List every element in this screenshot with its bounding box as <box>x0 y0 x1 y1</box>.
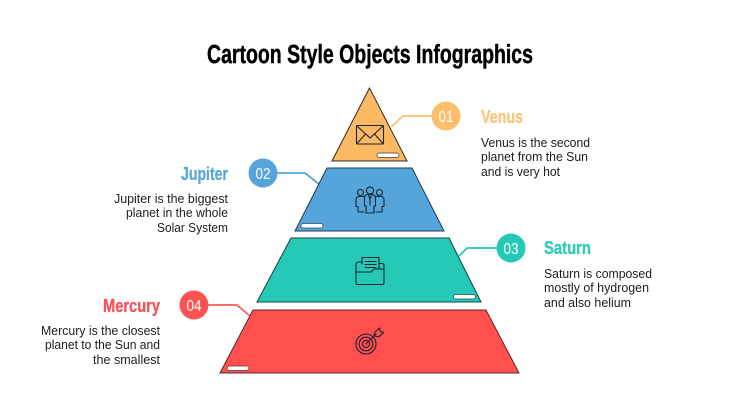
badge: 04: 04 <box>186 298 202 315</box>
badge: 01: 01 <box>438 109 454 126</box>
badge: 02: 02 <box>256 166 271 183</box>
badge: 02 <box>248 158 278 188</box>
pyramid tier 2: blue <box>295 168 444 231</box>
text block: Mercury: the smallest <box>93 353 161 367</box>
text block: Venus <box>481 107 590 179</box>
icon: team of people <box>356 187 384 213</box>
pyramid tier 3: teal <box>257 238 481 302</box>
title: Cartoon Style Objects Infographics <box>207 41 533 69</box>
text block: Saturn <box>544 238 652 310</box>
text block: Saturn: Saturn is composed <box>544 267 652 281</box>
text block: Saturn: mostly of hydrogen <box>544 281 649 295</box>
text block: Mercury <box>41 296 161 367</box>
pyramid tier 4: red <box>220 310 519 373</box>
text block: Saturn: Saturn <box>544 238 591 258</box>
badge: 01 <box>432 102 460 130</box>
pyramid tier 1: orange <box>332 88 407 161</box>
icon: folder with document <box>356 258 384 284</box>
text block: Saturn: and also helium <box>544 296 631 310</box>
text block: Venus: Venus <box>481 107 523 127</box>
connector: 03 <box>459 248 498 256</box>
text block: Venus: and is very hot <box>481 165 561 179</box>
text block: Venus: Venus is the second <box>481 136 590 150</box>
connector: 04 <box>207 305 250 316</box>
badge: 03 <box>496 234 526 262</box>
connector: 02 <box>276 173 319 184</box>
connector: 01 <box>391 116 433 127</box>
text block: Venus: planet from the Sun <box>481 150 588 164</box>
text block: Mercury: Mercury <box>103 296 160 316</box>
badge: 04 <box>180 290 208 320</box>
text block: Mercury: planet to the Sun and <box>45 338 160 352</box>
text block: Mercury: Mercury is the closest <box>41 324 161 338</box>
icon: target with dart <box>356 328 384 354</box>
icon: envelope <box>356 126 384 144</box>
text block: Jupiter: Jupiter <box>181 164 228 184</box>
badge: 03: 03 <box>504 241 519 258</box>
text block: Jupiter: Jupiter is the biggest <box>114 192 229 206</box>
text block: Jupiter: Solar System <box>157 221 228 235</box>
text block: Jupiter: planet in the whole <box>126 206 228 220</box>
text block: Jupiter <box>114 164 229 235</box>
